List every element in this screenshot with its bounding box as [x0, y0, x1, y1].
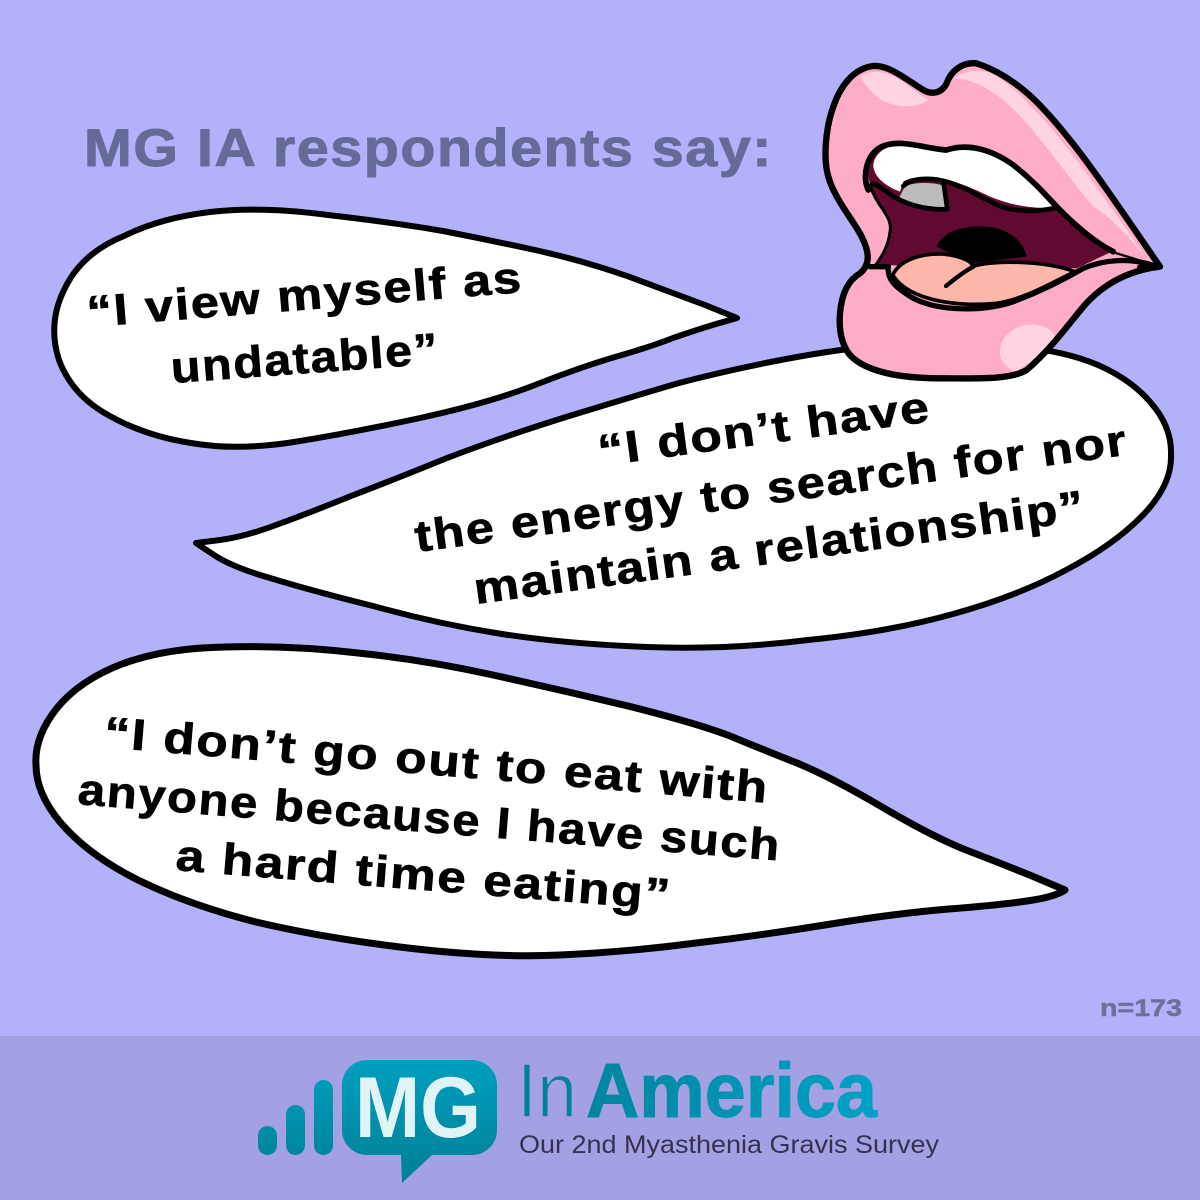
- speech bubble: undatable: undatable”: [169, 324, 441, 393]
- lip highlights: [860, 71, 1147, 372]
- cavity left edge: [871, 187, 890, 265]
- speech bubble: energy: [196, 342, 1171, 648]
- In: In: [517, 1048, 577, 1134]
- upper mouth edge: [865, 143, 1113, 252]
- grey tooth: [899, 183, 947, 208]
- speech bubble: undatable: [54, 210, 737, 447]
- speech bubble: energy: “I don’t have: [595, 382, 933, 476]
- tagline: Our 2nd Myasthenia Gravis Survey: [519, 1131, 940, 1159]
- icon: open mouth: [826, 63, 1161, 378]
- lips fill: [826, 63, 1160, 378]
- teeth outlines: [870, 179, 1053, 211]
- lips outline: [826, 63, 1160, 378]
- title: MG IA respondents say:: [84, 119, 773, 178]
- speech bubble: energy: the energy to search for nor: [412, 416, 1131, 562]
- speech bubble: eating: anyone because I have such: [76, 765, 783, 871]
- logo: [258, 1048, 940, 1183]
- speech bubble: undatable: “I view myself as: [85, 253, 524, 337]
- mouth cavity: [867, 143, 1112, 268]
- throat: [937, 226, 1027, 263]
- sample size: n=173: [1100, 995, 1182, 1022]
- footer band: [0, 1036, 1200, 1200]
- mouth corner: [1138, 263, 1161, 267]
- speech bubble: eating: a hard time eating”: [174, 831, 674, 920]
- lower mouth edge: [870, 260, 1157, 309]
- speech bubble: eating: “I don’t go out to eat with: [102, 708, 771, 813]
- tongue: [893, 254, 1075, 304]
- signal bars: [258, 1080, 333, 1155]
- America: America: [586, 1048, 878, 1134]
- speech bubble: eating: [36, 647, 1065, 956]
- upper teeth: [873, 145, 1053, 208]
- tongue crease: [946, 267, 973, 286]
- MG letters: MG: [355, 1060, 481, 1156]
- corner line: [1112, 252, 1157, 267]
- speech bubble: energy: maintain a relationship”: [471, 482, 1089, 614]
- chat bubble mark: [342, 1060, 497, 1183]
